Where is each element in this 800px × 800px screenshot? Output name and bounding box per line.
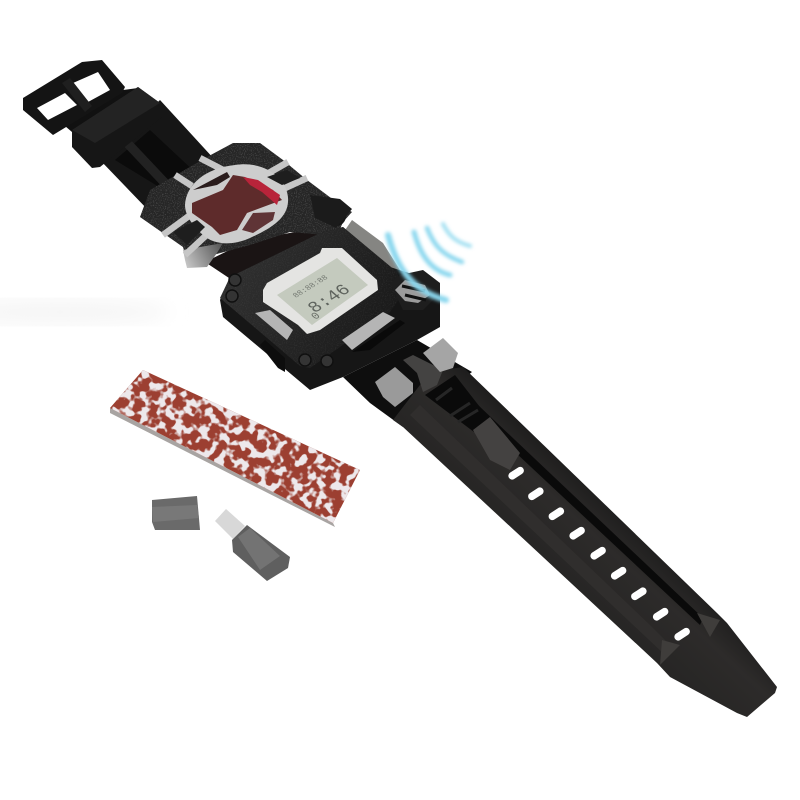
dark window panels: [173, 220, 205, 245]
strap edge highlight: [410, 405, 670, 655]
grey side bar: [343, 220, 400, 277]
card edge: [110, 408, 335, 527]
lower module tab: [183, 243, 223, 268]
upper strap band: [100, 100, 215, 212]
keeper bar: [403, 355, 443, 392]
speaker grille left: [255, 310, 293, 340]
side button: [260, 340, 285, 372]
LCD lower digit: 0: [309, 311, 324, 322]
buckle: [23, 60, 125, 135]
speaker octagon: [390, 270, 440, 310]
textured tongue: [473, 417, 520, 470]
grey cap: [152, 496, 200, 530]
ratchet steps: [425, 375, 490, 432]
side crank: [310, 195, 352, 228]
signal waves: [388, 224, 470, 300]
tip facets: [660, 640, 680, 665]
connector between upper module and watch body: [205, 225, 335, 282]
LCD bezel: [263, 248, 378, 334]
upper module: [140, 143, 352, 268]
silver cross frame: [163, 158, 307, 255]
grey bolt with white tip: [215, 509, 290, 581]
strap end under buckle: [58, 88, 138, 132]
main watch body: [220, 227, 440, 390]
card face: [110, 370, 360, 523]
strap connector under body: [343, 340, 472, 427]
red lens: [192, 172, 282, 235]
right bolt: [423, 338, 458, 372]
LCD screen: [277, 258, 368, 325]
left bolt: [375, 367, 413, 407]
LCD top row: 88:88:88: [291, 274, 331, 300]
product scene: [23, 60, 777, 717]
strap groove: [470, 405, 703, 625]
strap channel: [115, 130, 197, 193]
screws: [226, 274, 333, 367]
mottled card: [110, 370, 360, 527]
LCD readout: 8:46: [304, 282, 356, 317]
speaker grille right: [342, 312, 395, 350]
strap holes: [507, 465, 691, 642]
background shadow: [0, 300, 170, 324]
upper strap with buckle: [23, 60, 215, 212]
lower strap: [375, 338, 777, 717]
strap keeper: [72, 87, 162, 168]
